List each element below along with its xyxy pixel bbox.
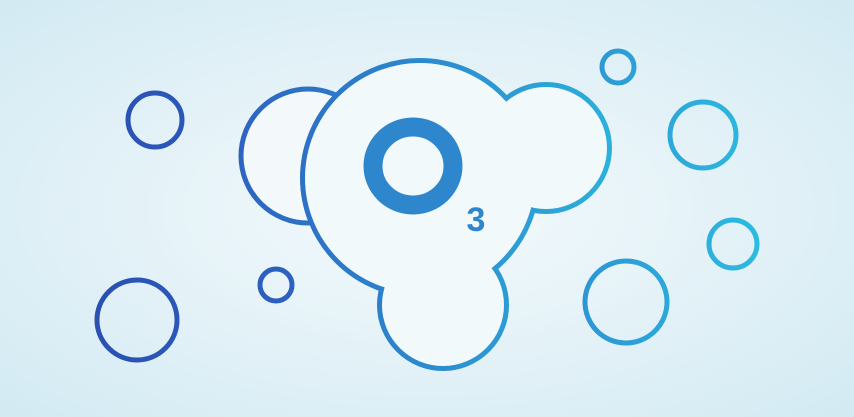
molecule <box>241 63 607 366</box>
O3 label <box>373 127 485 239</box>
bubbles <box>97 51 757 360</box>
O3 label: 3 <box>467 201 485 239</box>
